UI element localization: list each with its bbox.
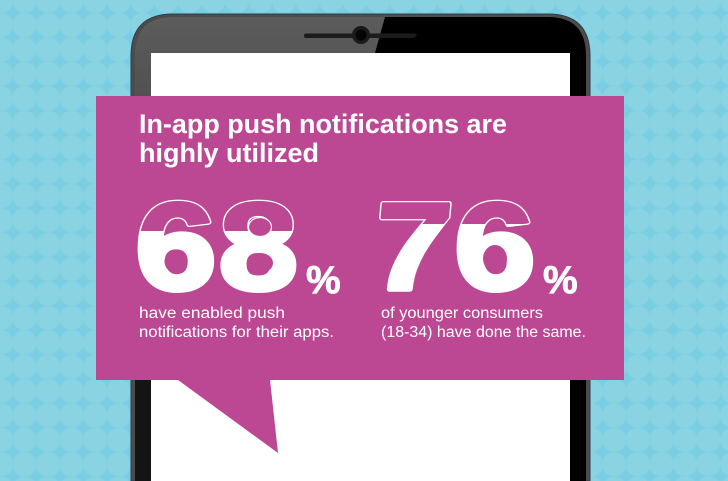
numeral 76: 6 [454,177,535,316]
stat: 68 percent [138,200,340,340]
caption: have enabled push [139,305,285,322]
percent sign: % [543,259,578,302]
numeral 76: 7 [368,177,457,315]
numeral 68: 6 [136,177,216,316]
numeral 68: 6 [136,177,216,316]
caption [381,305,586,341]
caption: (18-34) have done the same. [381,324,586,341]
smartphone [131,14,590,481]
speech bubble [96,96,624,453]
stat: 76 percent [379,200,584,340]
numeral 76: 7 [368,177,457,315]
numeral 68 [138,200,296,293]
numeral 68: 8 [219,178,298,316]
percent sign: % [306,259,341,302]
heading: In-app push notifications are [139,109,507,139]
heading: highly utilized [139,138,319,168]
caption [139,305,334,341]
caption: of younger consumers [381,305,543,322]
heading [139,109,507,168]
numeral 68: 8 [219,178,298,316]
screen [151,53,570,481]
numeral 76 [379,200,534,293]
caption: notifications for their apps. [139,324,334,341]
speaker and camera [304,26,417,44]
numeral 76: 6 [454,177,535,316]
